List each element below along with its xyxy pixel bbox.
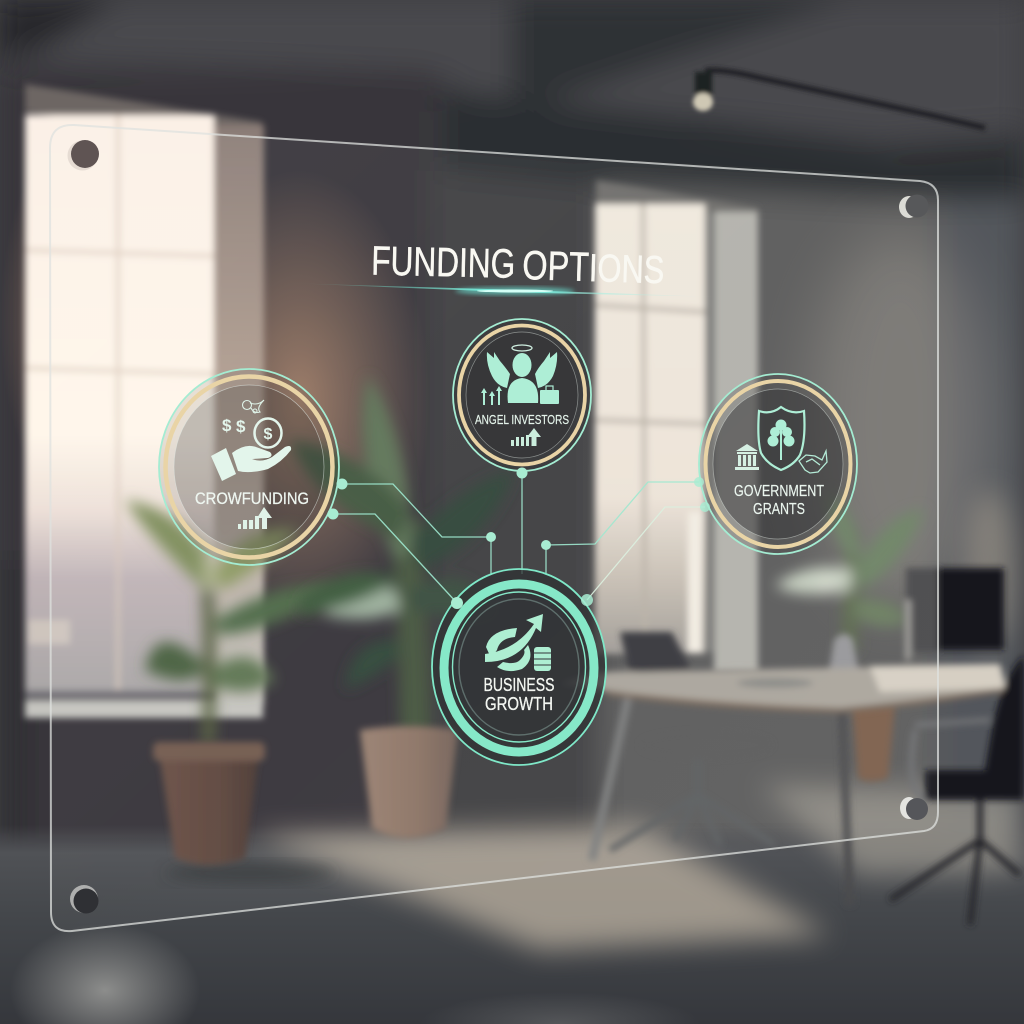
label: business growth: BUSINESS: [484, 675, 554, 695]
icon: small growth chart: [238, 507, 272, 529]
icon: hand with coins: $: [236, 417, 246, 436]
icon: hand with coins: [211, 400, 291, 481]
circle: business growth: GROWTH: [485, 694, 553, 714]
glass panel: [50, 125, 938, 931]
title underline glow: [300, 284, 720, 297]
right plant: [775, 490, 925, 650]
label: angel investors: ANGEL INVESTORS: [475, 412, 569, 427]
floor: [0, 825, 1024, 1024]
left window: [25, 84, 264, 718]
circle: business growth: [432, 569, 606, 765]
standoff screw: bottom left: [70, 885, 98, 914]
connector lines: [333, 472, 705, 603]
standoff screw: bottom right: [900, 797, 928, 820]
circle: crowdfunding: [159, 369, 339, 565]
desk, monitor and chairs: [560, 568, 1024, 925]
standoff screw: top right: [899, 194, 928, 218]
standoff screw: top left: [68, 140, 99, 170]
connector nodes: [328, 468, 710, 609]
icon: angel with briefcase and arrows: [481, 345, 559, 405]
icon: handshake: [799, 451, 827, 473]
icon: small chart arrow: [511, 428, 541, 446]
label: government grants: GOVERNMENT: [734, 483, 824, 500]
circle: angel investors: [453, 319, 591, 471]
title: FUNDING: [371, 238, 516, 287]
warm glow around left window: [0, 120, 430, 630]
ceiling track light: [693, 70, 985, 128]
label: crowdfunding: CROWFUNDING: [195, 489, 309, 508]
icon: bank building: [735, 444, 759, 470]
icon: hand with coins: $: [222, 416, 232, 435]
left plant: [125, 500, 335, 745]
pots: [153, 634, 895, 865]
title: OPTIONS: [522, 242, 665, 292]
right window: [595, 180, 758, 672]
icon: growth arrow and coins: [485, 614, 551, 671]
right wall light: [810, 230, 990, 610]
icon: shield with leaf: [758, 407, 804, 470]
icon: hand with coins: $: [264, 426, 273, 443]
title: [371, 238, 665, 292]
centre plant: [290, 375, 515, 735]
circle: government grants: GRANTS: [753, 501, 805, 518]
circle: government grants: [699, 374, 857, 554]
